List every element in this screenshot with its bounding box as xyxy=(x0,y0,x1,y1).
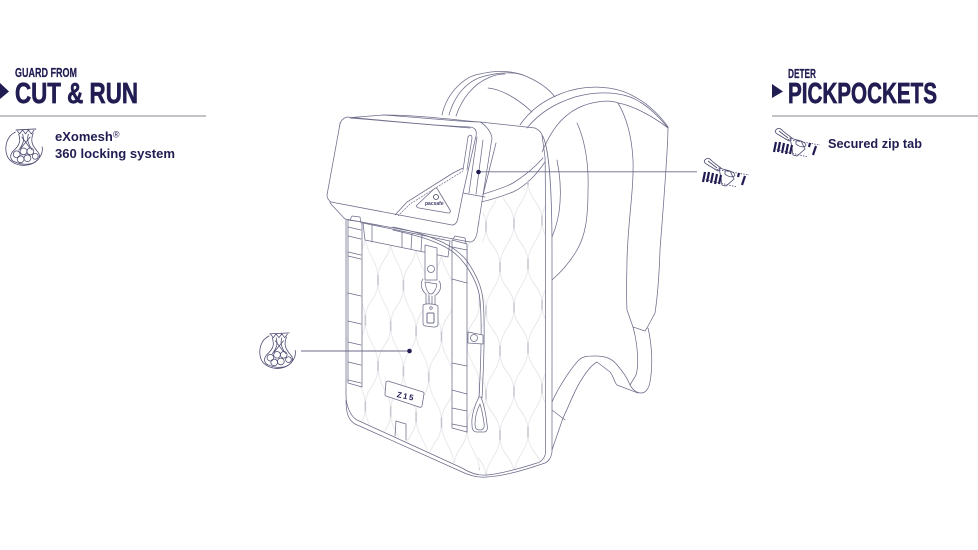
front panel quilting xyxy=(346,222,480,470)
section: guard from cut and run xyxy=(0,66,206,165)
bottom tab xyxy=(395,421,406,440)
callout: eXomesh xyxy=(260,333,412,368)
heading: cut and run: CUT & RUN xyxy=(15,78,138,110)
centre lock strap xyxy=(421,245,441,327)
z15 label plate: Z15 xyxy=(396,390,416,403)
callout: zip tab xyxy=(476,158,749,187)
divider left xyxy=(0,116,206,117)
arrow: pickpockets marker xyxy=(772,84,783,98)
divider right xyxy=(772,116,978,117)
section: deter pickpockets xyxy=(772,67,978,157)
icon: eXomesh callout xyxy=(260,333,295,368)
locking cable xyxy=(393,227,484,398)
back panel and shoulder straps xyxy=(442,71,668,450)
arrow: cut and run marker xyxy=(0,83,9,99)
pacsafe badge xyxy=(395,168,463,216)
icon: secured zip tab xyxy=(774,128,820,157)
small heading: deter: DETER xyxy=(788,67,816,81)
icon: zip tab callout xyxy=(703,158,749,187)
cable clip xyxy=(468,332,483,344)
text: eXomesh 360 locking system: ® xyxy=(113,130,120,140)
webbing strip left xyxy=(348,216,362,387)
icon: eXomesh xyxy=(6,129,42,165)
backpack illustration xyxy=(327,71,668,477)
z15 label plate xyxy=(385,381,424,407)
pacsafe badge: pacsafe xyxy=(425,201,444,207)
text: eXomesh 360 locking system: 360 locking system xyxy=(55,146,175,161)
small heading: guard from: GUARD FROM xyxy=(15,66,77,80)
upper pocket strap block xyxy=(363,223,450,257)
text: secured zip tab: Secured zip tab xyxy=(828,136,922,151)
cable loop end xyxy=(472,397,487,432)
bag body outline xyxy=(346,115,552,477)
front flap xyxy=(327,115,496,242)
webbing strip right xyxy=(452,236,467,432)
text: eXomesh 360 locking system: eXomesh xyxy=(55,129,113,144)
side panel quilting xyxy=(478,165,545,475)
